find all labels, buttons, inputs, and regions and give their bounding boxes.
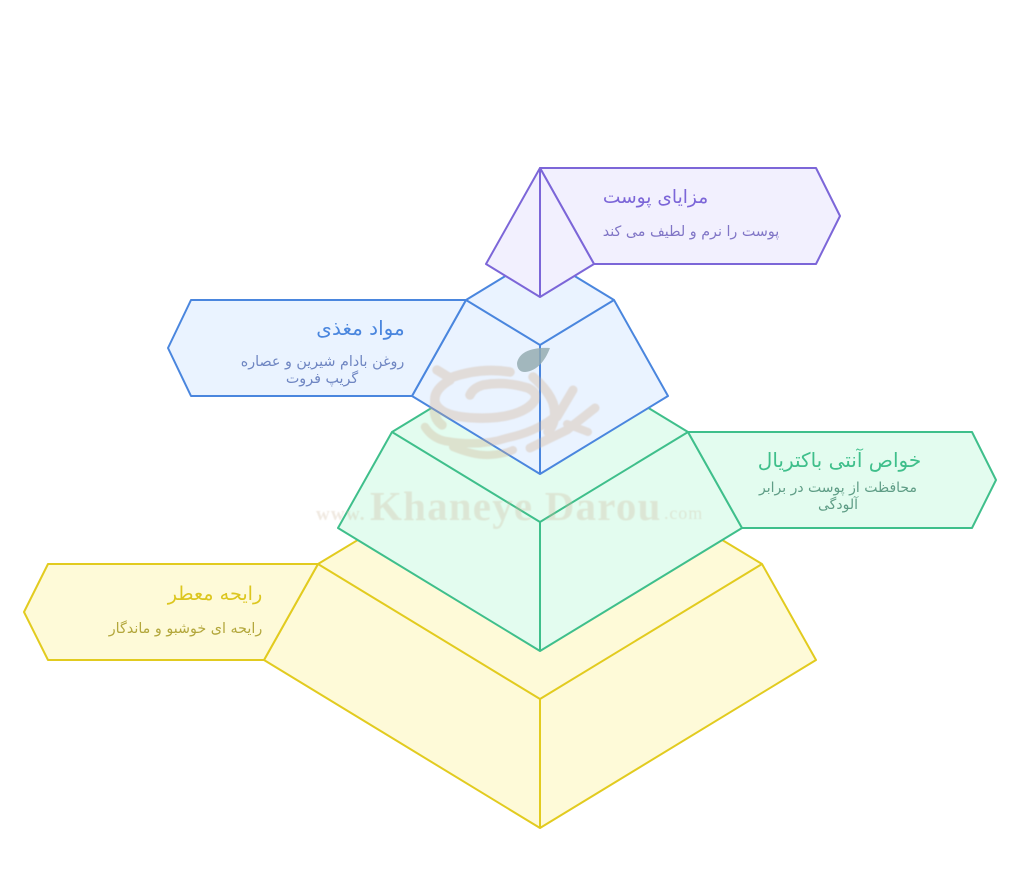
callout: aroma: رایحه ای خوشبو و ماندگار	[108, 620, 262, 637]
pyramid level: antibacterial (green)	[338, 342, 742, 651]
callout: skin benefits: پوست را نرم و لطیف می کند	[603, 224, 779, 240]
pyramid level: skin benefits (purple)	[486, 168, 594, 297]
pyramid level: nutrients (blue)	[412, 255, 668, 474]
callout: nutrients	[168, 300, 466, 396]
callout: antibacterial: آلودگی	[818, 496, 859, 513]
callout: antibacterial: خواص آنتی باکتریال	[758, 447, 921, 472]
callout: antibacterial: محافظت از پوست در برابر	[758, 480, 917, 496]
callout: aroma	[24, 564, 318, 660]
callout: nutrients: روغن بادام شیرین و عصاره	[241, 354, 404, 370]
callout: antibacterial	[688, 432, 996, 528]
watermark text: www.	[316, 504, 366, 525]
watermark leaf	[517, 348, 550, 372]
watermark text: .com	[664, 503, 703, 523]
callout: nutrients: گریپ فروت	[286, 370, 358, 387]
watermark logo	[425, 370, 595, 455]
pyramid level: aroma (yellow)	[264, 430, 816, 828]
callout: skin benefits	[540, 168, 840, 264]
callout: nutrients: مواد مغذی	[316, 316, 405, 340]
watermark text: Khaneye Darou	[370, 483, 662, 529]
callout: skin benefits: مزایای پوست	[603, 187, 708, 208]
callout: aroma: رایحه معطر	[167, 582, 262, 605]
